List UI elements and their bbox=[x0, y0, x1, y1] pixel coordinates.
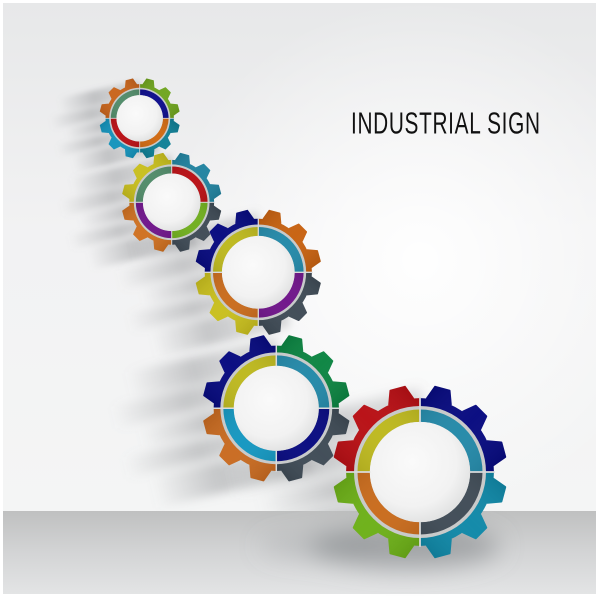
title: INDUSTRIAL SIGN bbox=[351, 105, 540, 140]
gear 3 bbox=[193, 207, 323, 337]
gear 2 bbox=[120, 151, 223, 254]
floor shadow of large gear bbox=[260, 524, 500, 568]
long cast shadows on wall bbox=[58, 80, 424, 511]
floor bbox=[3, 511, 596, 594]
gear 1 (smallest) bbox=[98, 77, 181, 160]
gear 5 (largest) bbox=[330, 382, 510, 562]
gear 4 bbox=[200, 332, 352, 484]
